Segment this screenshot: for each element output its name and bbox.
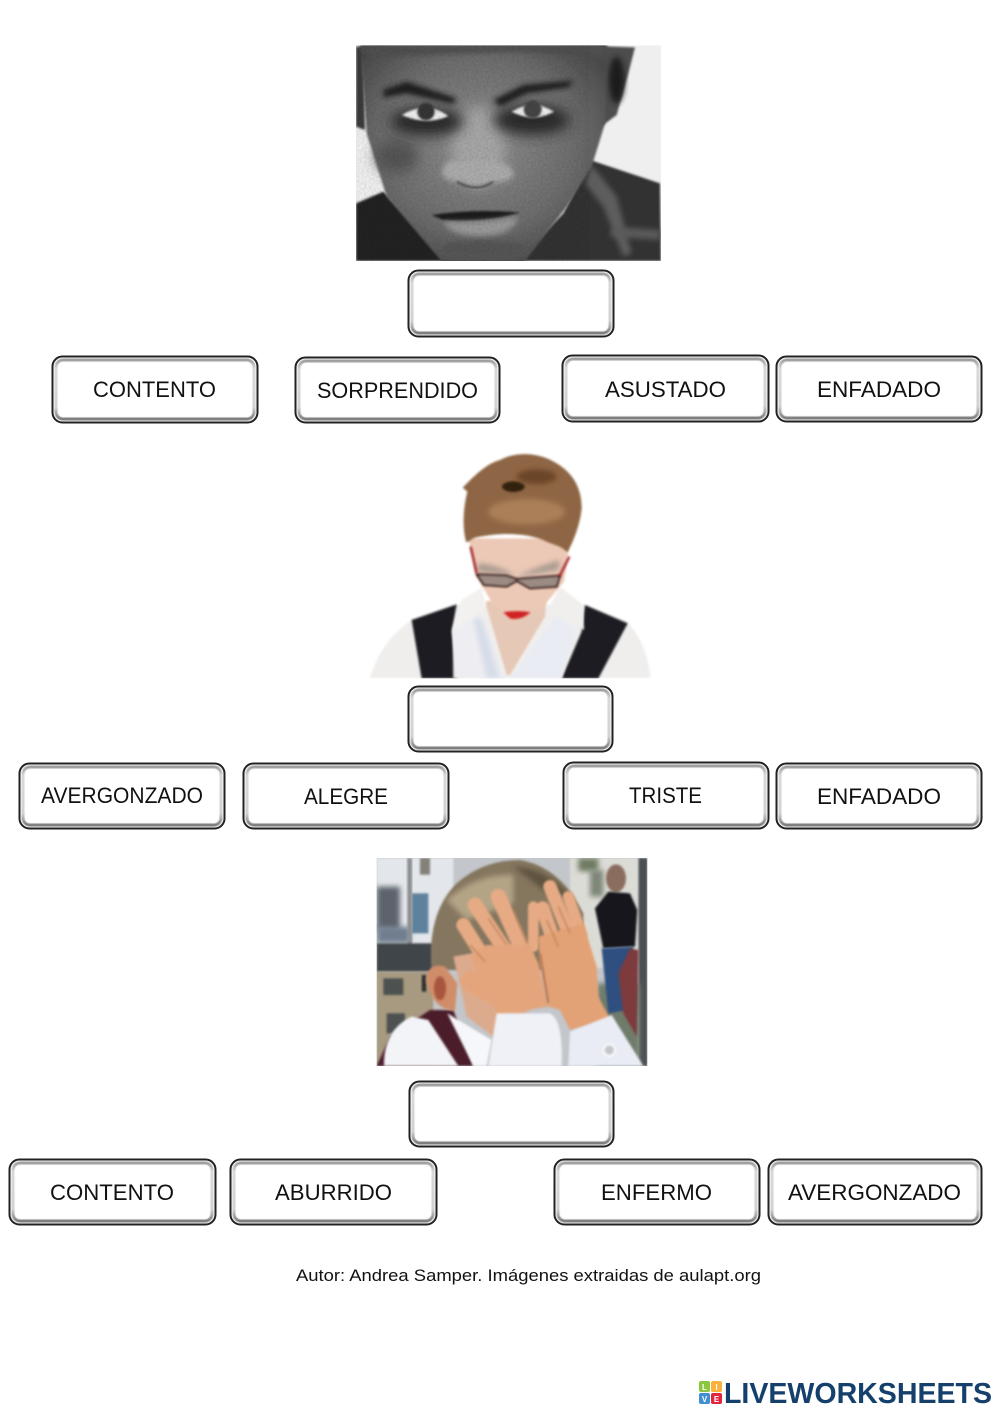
option: TRISTE: TRISTE <box>629 783 702 808</box>
icon: LIVE tiles: I <box>715 1383 718 1392</box>
icon: LIVE tiles: L <box>702 1383 707 1392</box>
answer box 2 <box>408 686 612 752</box>
option: ASUSTADO <box>562 356 768 422</box>
photo: boy covering his face <box>377 858 647 1067</box>
option: CONTENTO <box>52 356 258 422</box>
option: ENFERMO <box>554 1160 760 1224</box>
icon: LIVE tiles <box>699 1381 722 1404</box>
credit line: Autor: Andrea Samper. Imágenes extraidas de aulapt.org <box>296 1267 761 1285</box>
option: CONTENTO: CONTENTO <box>50 1180 174 1205</box>
logo: LIVEWORKSHEETS: LIVEWORKSHEETS <box>724 1378 992 1410</box>
icon: LIVE tiles: E <box>714 1395 720 1404</box>
option: ENFADADO <box>776 764 982 828</box>
option: ASUSTADO: ASUSTADO <box>605 377 726 402</box>
icon: LIVE tiles: V <box>702 1395 708 1404</box>
option: AVERGONZADO: AVERGONZADO <box>41 783 203 808</box>
option: AVERGONZADO <box>768 1160 982 1224</box>
option: ENFADADO: ENFADADO <box>817 784 941 809</box>
answer box 1 <box>408 270 614 336</box>
option: AVERGONZADO: AVERGONZADO <box>788 1180 961 1205</box>
option: ENFADADO <box>776 356 982 422</box>
photo: woman looking down <box>370 454 651 678</box>
option: ENFERMO: ENFERMO <box>601 1180 712 1205</box>
option: ABURRIDO <box>230 1160 436 1224</box>
option: TRISTE <box>564 762 768 828</box>
option: SORPRENDIDO <box>296 358 500 422</box>
option: ABURRIDO: ABURRIDO <box>275 1180 392 1205</box>
option: ALEGRE: ALEGRE <box>304 784 388 809</box>
option: ENFADADO: ENFADADO <box>817 377 941 402</box>
option: AVERGONZADO <box>20 764 224 828</box>
option: SORPRENDIDO: SORPRENDIDO <box>317 378 478 403</box>
answer box 3 <box>410 1082 614 1146</box>
option: CONTENTO <box>10 1160 216 1224</box>
photo: angry boy <box>356 45 661 263</box>
option: ALEGRE <box>244 764 448 828</box>
option: CONTENTO: CONTENTO <box>93 377 216 402</box>
